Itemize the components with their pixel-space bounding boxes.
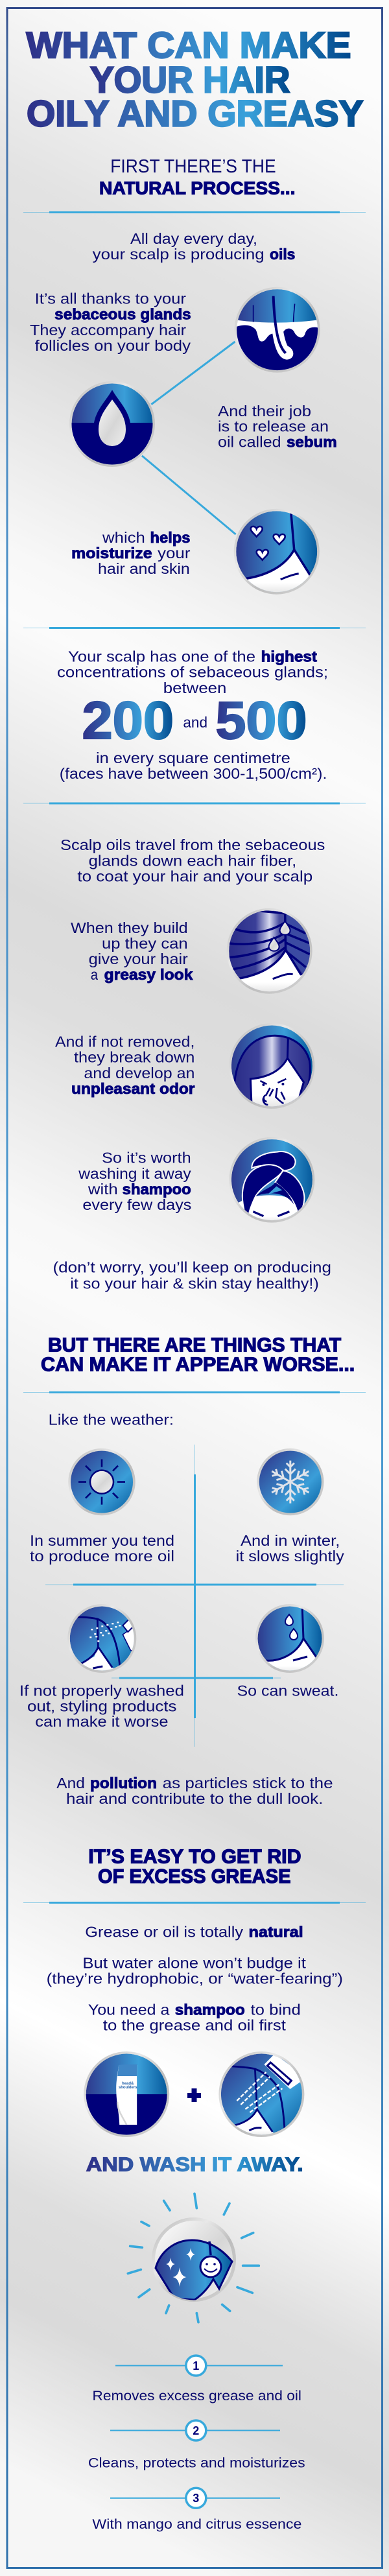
text: sebaceous glands: It’s all thanks to your	[35, 290, 186, 307]
text: greasy look: up they can	[102, 935, 188, 952]
text: unpleasant odor: and develop an	[84, 1065, 194, 1081]
text: styling products: can make it worse	[35, 1713, 168, 1730]
benefit 1	[92, 2356, 301, 2404]
icon: hearts on hair	[231, 509, 322, 597]
icon: hair follicle	[232, 287, 323, 375]
text: keep producing: it so your hair & skin stay healthy!)	[70, 1275, 319, 1292]
heading: natural process	[99, 156, 295, 198]
icon: shampoo bottle	[81, 2051, 172, 2140]
text: pollution: And	[56, 1775, 85, 1791]
text: scalp oils travel: Scalp oils travel from the sebaceous	[60, 836, 325, 853]
text: highest concentration: concentrations of sebaceous glands;	[57, 664, 328, 681]
text: keep producing: (don’t worry, you’ll keep on producing	[53, 1259, 331, 1276]
text: styling products: out, styling products	[27, 1697, 176, 1714]
text: winter: it slows slightly	[236, 1548, 344, 1565]
icon: greasy hair	[227, 908, 312, 994]
text: summer: In summer you tend	[30, 1532, 174, 1549]
text: wash with shampoo: shampoo	[123, 1181, 191, 1198]
text: summer	[30, 1532, 174, 1565]
benefit 1: 1	[193, 2359, 199, 2372]
text: winter	[236, 1532, 344, 1565]
text: moisturize: hair and skin	[98, 560, 190, 577]
text: greasy look	[71, 919, 193, 983]
connector: drop to hearts	[142, 456, 236, 534]
text: pollution: hair and contribute to the dull look.	[66, 1790, 323, 1807]
heading: natural process: NATURAL PROCESS...	[99, 178, 295, 198]
text: hydrophobic: (they’re hydrophobic, or “water-fearing”)	[47, 1970, 343, 1987]
text: release sebum: oil called	[218, 433, 281, 450]
text: grease is natural: natural	[249, 1924, 303, 1941]
text: unpleasant odor: unpleasant odor	[71, 1080, 194, 1097]
text: release sebum: is to release an	[218, 418, 329, 434]
text: scalp producing oils: oils	[270, 246, 295, 263]
text: unpleasant odor: they break down	[74, 1049, 194, 1066]
big numbers	[82, 691, 307, 750]
text: unpleasant odor	[55, 1034, 194, 1097]
text: moisturize: moisturize	[71, 545, 152, 561]
big numbers: 200	[82, 691, 174, 750]
text: moisturize	[71, 529, 191, 577]
icon: styling spray	[67, 1604, 136, 1673]
text: highest concentration: Your scalp has one of the	[68, 648, 255, 665]
text: pollution: as particles stick to the	[163, 1775, 333, 1791]
text: unpleasant odor: And if not removed,	[55, 1034, 194, 1050]
text: greasy look: a	[91, 966, 98, 983]
text: keep producing	[53, 1259, 331, 1292]
icon: shampoo bottle: head&	[122, 2082, 134, 2086]
text: grease is natural	[85, 1924, 303, 1941]
title: OILY AND GREASY	[27, 93, 363, 134]
text: highest concentration: highest	[261, 648, 317, 665]
icon: plus	[187, 2088, 201, 2102]
text: release sebum: And their job	[218, 403, 311, 419]
text: sebaceous glands: sebaceous glands	[54, 305, 191, 322]
text: winter: And in winter,	[241, 1532, 340, 1549]
icon: shower	[218, 2051, 307, 2140]
benefit 2: Cleans, protects and moisturizes	[88, 2456, 305, 2471]
text: greasy look: give your hair	[89, 951, 188, 967]
text: pollution	[56, 1775, 333, 1807]
text: grease is natural: Grease or oil is totally	[85, 1924, 244, 1941]
text: per square centimetre: in every square centimetre	[96, 750, 290, 766]
text: greasy look: When they build	[71, 919, 188, 936]
heading: easy to get rid: OF EXCESS GREASE	[98, 1865, 290, 1887]
icon: sparkle rays	[128, 2193, 259, 2322]
text: moisturize: helps	[150, 529, 191, 546]
text: styling products	[19, 1682, 184, 1730]
text: wash with shampoo	[78, 1149, 191, 1213]
text: summer: to produce more oil	[30, 1548, 174, 1565]
text: sebaceous glands	[30, 290, 191, 354]
text: moisturize: which	[102, 529, 145, 546]
icon: oil drop	[67, 381, 158, 469]
heading: things that make it worse: BUT THERE ARE THINGS THAT	[48, 1333, 341, 1356]
connector: drop to follicle	[151, 342, 235, 405]
text: wash with shampoo: with	[88, 1181, 118, 1198]
text: sebaceous glands: follicles on your body	[35, 337, 191, 354]
text: need a shampoo: You need a	[88, 2002, 170, 2018]
icon: snowflake	[257, 1448, 324, 1515]
text: like the weather: Like the weather:	[49, 1412, 174, 1428]
benefit 3	[92, 2488, 301, 2532]
text: scalp producing oils	[93, 230, 295, 263]
title	[26, 25, 363, 134]
big numbers: and	[183, 714, 207, 731]
big numbers: 500	[215, 691, 307, 750]
text: scalp producing oils: your scalp is producing	[93, 246, 265, 263]
text: sebaceous glands: They accompany hair	[30, 322, 186, 338]
heading: things that make it worse: CAN MAKE IT APPEAR WORSE...	[41, 1353, 355, 1376]
icon: sun	[68, 1448, 136, 1515]
heading: easy to get rid	[88, 1845, 301, 1887]
text: hydrophobic: But water alone won’t budge it	[82, 1955, 307, 1972]
text: wash with shampoo: every few days	[82, 1196, 191, 1213]
text: hydrophobic	[47, 1955, 343, 1987]
text: scalp oils travel: glands down each hair fiber,	[89, 853, 296, 869]
text: scalp producing oils: All day every day,	[130, 230, 257, 247]
heading: natural process: FIRST THERE’S THE	[110, 156, 276, 177]
benefit 2: 2	[193, 2424, 199, 2437]
text: sweat: So can sweat.	[237, 1682, 338, 1699]
icon: unpleasant odor	[229, 1023, 314, 1111]
text: moisturize: your	[158, 545, 191, 561]
text: styling products: If not properly washed	[19, 1682, 184, 1699]
heading: things that make it worse	[41, 1333, 355, 1376]
benefit 3: With mango and citrus essence	[92, 2517, 301, 2532]
text: scalp oils travel	[60, 836, 325, 885]
text: release sebum: sebum	[287, 433, 337, 450]
text: wash with shampoo: So it’s worth	[102, 1149, 191, 1166]
icon: sweat	[255, 1604, 324, 1673]
benefit 2	[88, 2420, 305, 2471]
text: scalp oils travel: to coat your hair and your scalp	[77, 868, 312, 885]
text: need a shampoo: to the grease and oil first	[103, 2017, 287, 2034]
icon: shampoo bottle: shoulders	[119, 2086, 137, 2090]
text: per square centimetre: (faces have between 300-1,500/cm²).	[60, 765, 327, 782]
text: greasy look: greasy look	[104, 966, 193, 983]
text: wash with shampoo: washing it away	[78, 1165, 191, 1182]
text: highest concentration: between	[163, 679, 226, 696]
benefit 3: 3	[193, 2492, 199, 2505]
text: need a shampoo: shampoo	[175, 2002, 245, 2018]
benefit 1: Removes excess grease and oil	[92, 2389, 301, 2404]
text: need a shampoo: to bind	[250, 2002, 301, 2018]
title: YOUR HAIR	[90, 60, 290, 101]
text: need a shampoo	[88, 2002, 301, 2034]
text: per square centimetre	[60, 750, 327, 782]
icon: hair towel	[226, 1137, 317, 1225]
heading: and wash it away: AND WASH IT AWAY.	[86, 2153, 303, 2176]
text: pollution: pollution	[90, 1775, 157, 1791]
icon: clean smiling hair	[152, 2217, 236, 2302]
heading: easy to get rid: IT’S EASY TO GET RID	[88, 1845, 301, 1868]
title: WHAT CAN MAKE	[26, 25, 351, 66]
text: release sebum	[218, 403, 337, 450]
text: highest concentration	[57, 648, 328, 696]
